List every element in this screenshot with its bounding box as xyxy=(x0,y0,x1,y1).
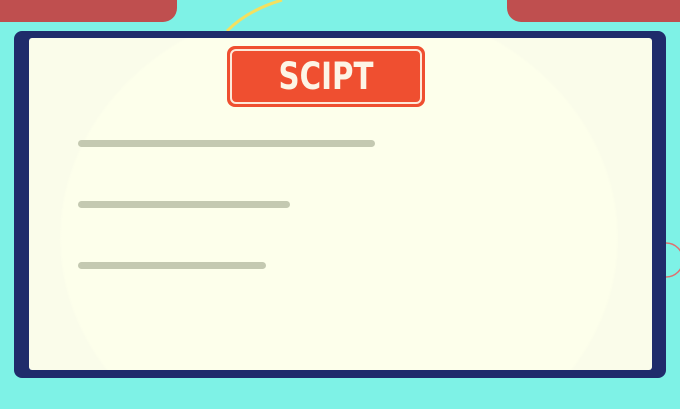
title: SCIPT xyxy=(279,55,373,98)
panel: script board xyxy=(29,38,652,370)
red tab left xyxy=(0,0,177,22)
text line 3 xyxy=(78,262,266,269)
title badge xyxy=(227,46,425,107)
text line 1 xyxy=(78,140,375,147)
red tab right xyxy=(507,0,680,22)
text line 2 xyxy=(78,201,290,208)
